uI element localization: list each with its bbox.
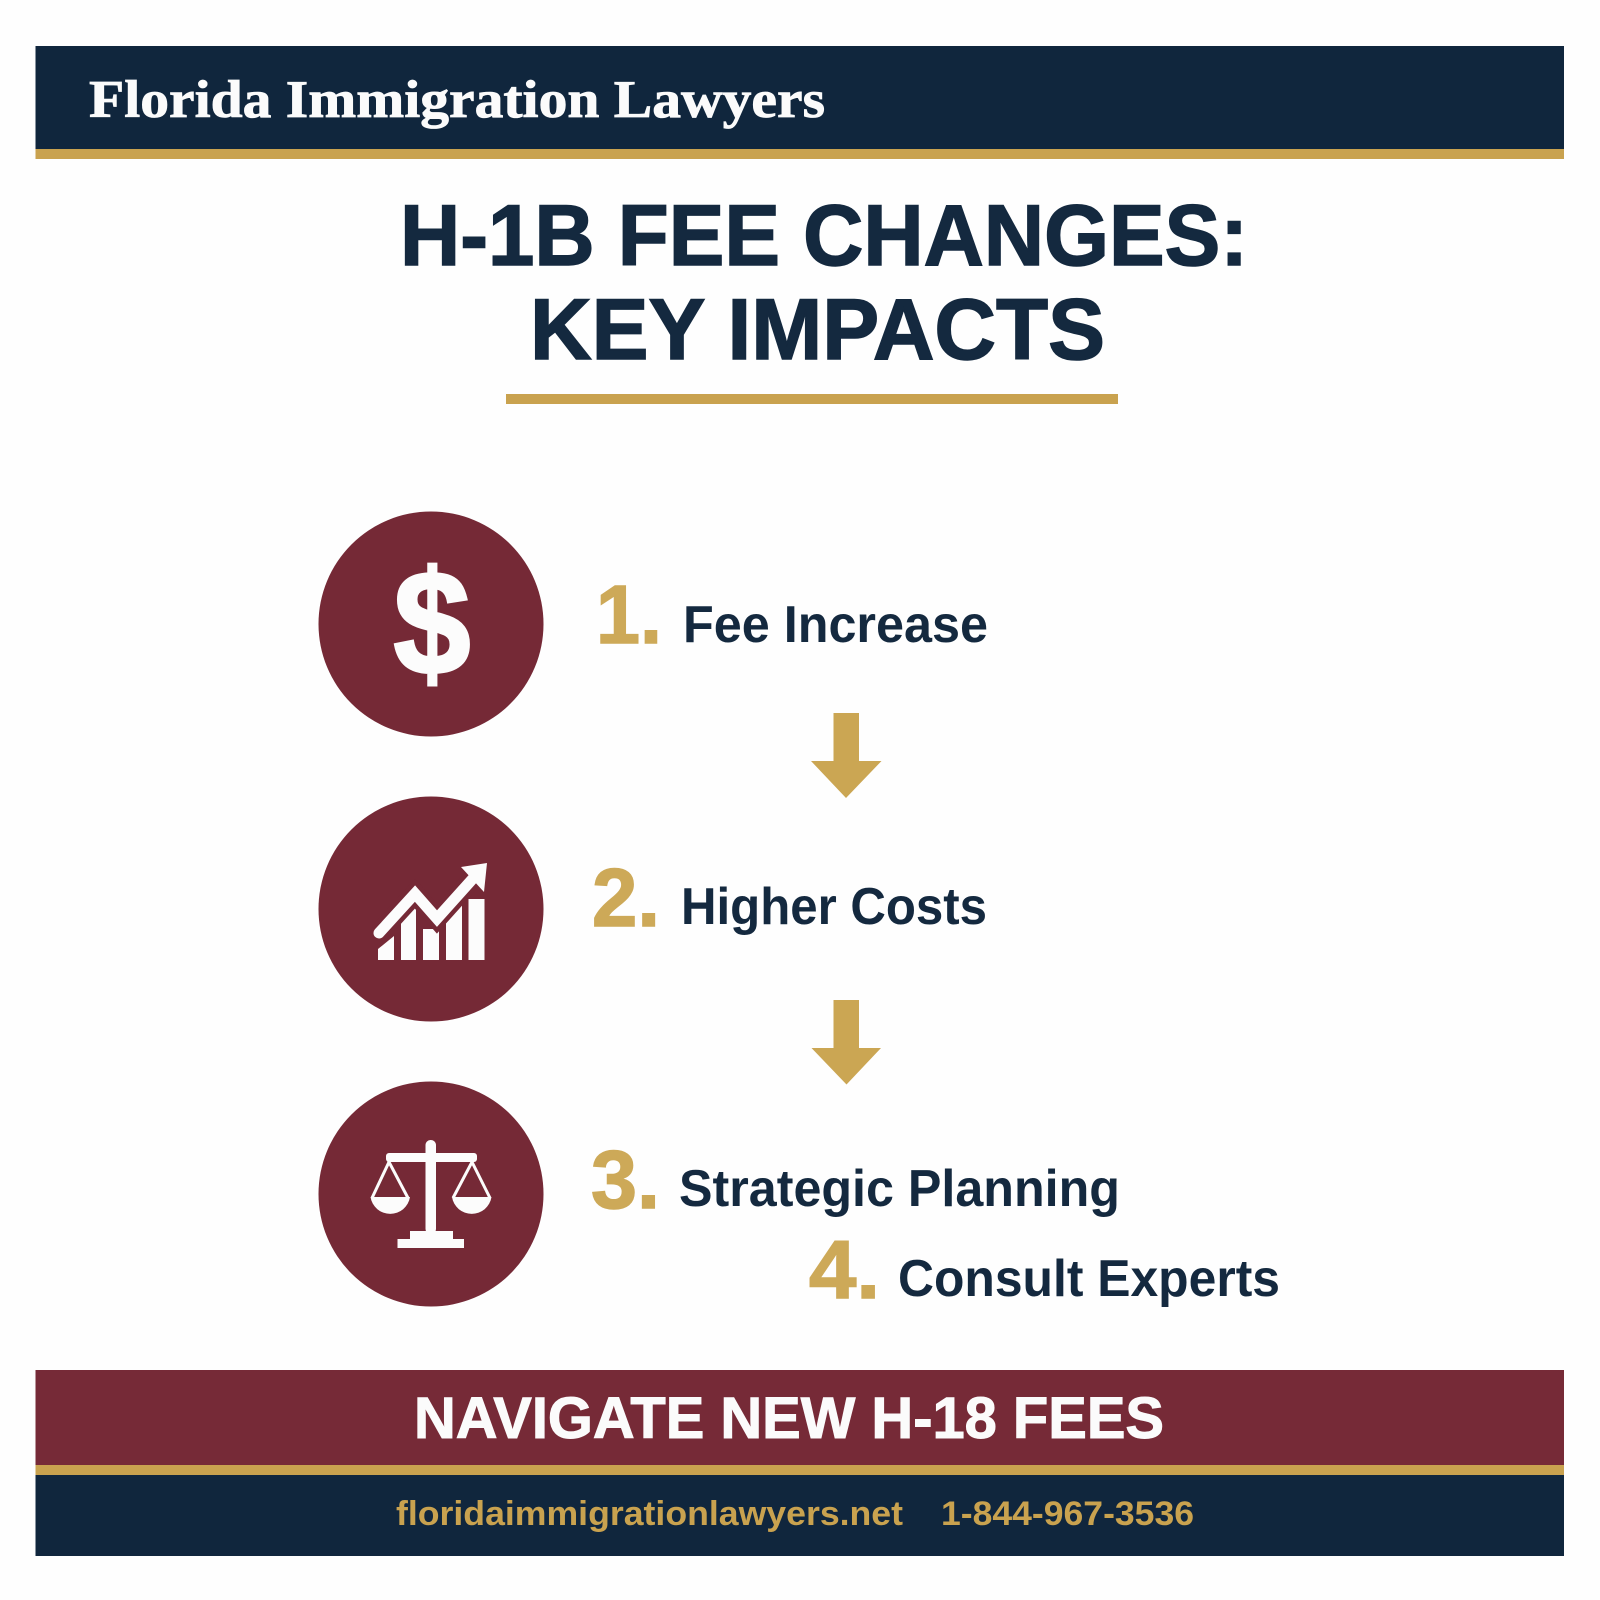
header banner xyxy=(36,46,1564,159)
step 3: strategic planning: Strategic Planning xyxy=(679,1160,1120,1218)
arrow: step 2 to step 3 xyxy=(812,1000,881,1084)
icon: scales of justice xyxy=(318,1082,544,1306)
phone number: 1-844-967-3536 xyxy=(941,1495,1194,1533)
step 3: strategic planning xyxy=(591,1133,1120,1226)
step 4: consult experts: 4. xyxy=(809,1223,880,1316)
step 4: consult experts xyxy=(809,1223,1280,1316)
icon: rising chart xyxy=(318,796,544,1022)
step 1: fee increase xyxy=(596,568,988,661)
step 2: higher costs: Higher Costs xyxy=(681,878,987,936)
call to action banner xyxy=(36,1370,1564,1465)
step 2: higher costs xyxy=(592,851,987,944)
call to action text: NAVIGATE NEW H-18 FEES xyxy=(414,1386,1164,1451)
step 1: fee increase: 1. xyxy=(596,568,662,661)
step 1: fee increase: Fee Increase xyxy=(683,596,988,654)
step 3: strategic planning: 3. xyxy=(591,1133,660,1226)
arrow: step 1 to step 2 xyxy=(811,713,882,798)
title: H-1B FEE CHANGES: xyxy=(400,188,1248,284)
title xyxy=(400,188,1248,378)
website: floridaimmigrationlawyers.net xyxy=(396,1495,903,1533)
icon: dollar sign xyxy=(318,512,544,736)
header brand name: Florida Immigration Lawyers xyxy=(89,71,825,129)
step 4: consult experts: Consult Experts xyxy=(898,1250,1280,1308)
title: KEY IMPACTS xyxy=(530,282,1105,378)
title underline xyxy=(506,394,1118,404)
footer gold divider xyxy=(36,1465,1564,1475)
footer contact bar xyxy=(36,1475,1564,1556)
step 2: higher costs: 2. xyxy=(592,851,660,944)
icon: dollar sign: $ xyxy=(394,541,470,706)
